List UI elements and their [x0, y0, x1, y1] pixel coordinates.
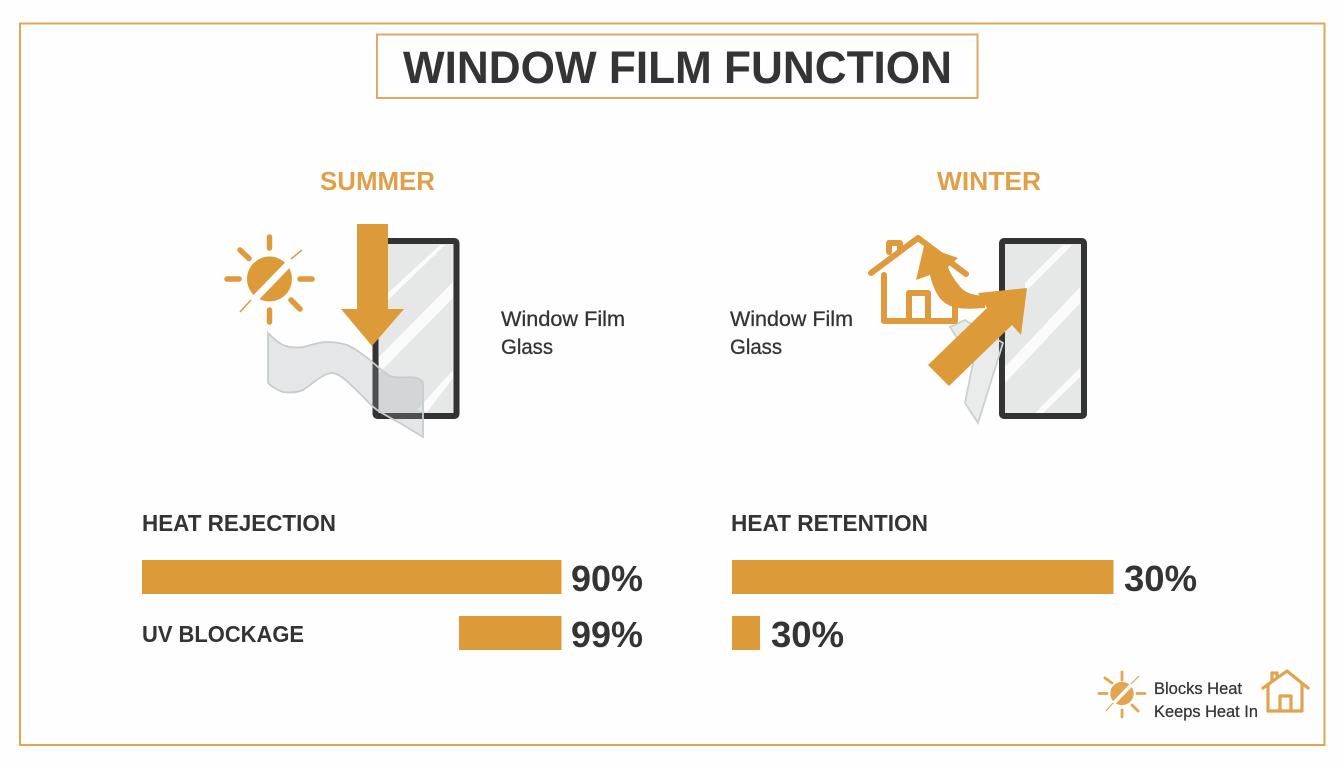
icon: legend house	[1263, 671, 1308, 711]
metric: heat retention: HEAT RETENTION	[731, 510, 928, 536]
panel: winter	[730, 166, 1197, 655]
summer heading: SUMMER	[320, 166, 435, 196]
metric: secondary retention: 30%	[771, 614, 844, 655]
legend	[1099, 671, 1308, 721]
film labels	[501, 308, 625, 359]
legend text	[1154, 680, 1258, 721]
window glass	[376, 241, 456, 416]
icon: blocked sun	[227, 237, 312, 322]
film labels	[730, 308, 853, 359]
arrow: heat blocked downward	[341, 224, 404, 346]
film labels: Window Film	[501, 308, 625, 331]
metric: UV blockage: UV BLOCKAGE	[142, 621, 304, 647]
panel: summer	[142, 166, 643, 655]
film labels: Glass	[730, 336, 782, 359]
legend text: Blocks Heat	[1154, 680, 1242, 698]
arrow: heat entering window	[928, 288, 1027, 386]
window film ribbon	[950, 320, 1003, 423]
winter heading: WINTER	[937, 166, 1041, 196]
metric: secondary retention	[732, 614, 844, 655]
metric: UV blockage	[142, 614, 643, 655]
arrow: heat curving back into house	[916, 246, 985, 309]
legend text: Keeps Heat In	[1154, 703, 1258, 721]
metric: heat retention	[731, 510, 1197, 599]
film labels: Window Film	[730, 308, 853, 331]
icon: legend sun	[1099, 672, 1145, 717]
icon: house	[871, 238, 966, 321]
metric: heat rejection	[142, 510, 643, 599]
metric: heat retention: 30%	[1124, 558, 1197, 599]
window glass	[1002, 241, 1084, 416]
window film ribbon	[268, 333, 423, 437]
metric: heat rejection: HEAT REJECTION	[142, 510, 336, 536]
metric: UV blockage: 99%	[571, 614, 643, 655]
title: WINDOW FILM FUNCTION	[403, 42, 952, 93]
film labels: Glass	[501, 336, 553, 359]
metric: heat rejection: 90%	[571, 558, 643, 599]
